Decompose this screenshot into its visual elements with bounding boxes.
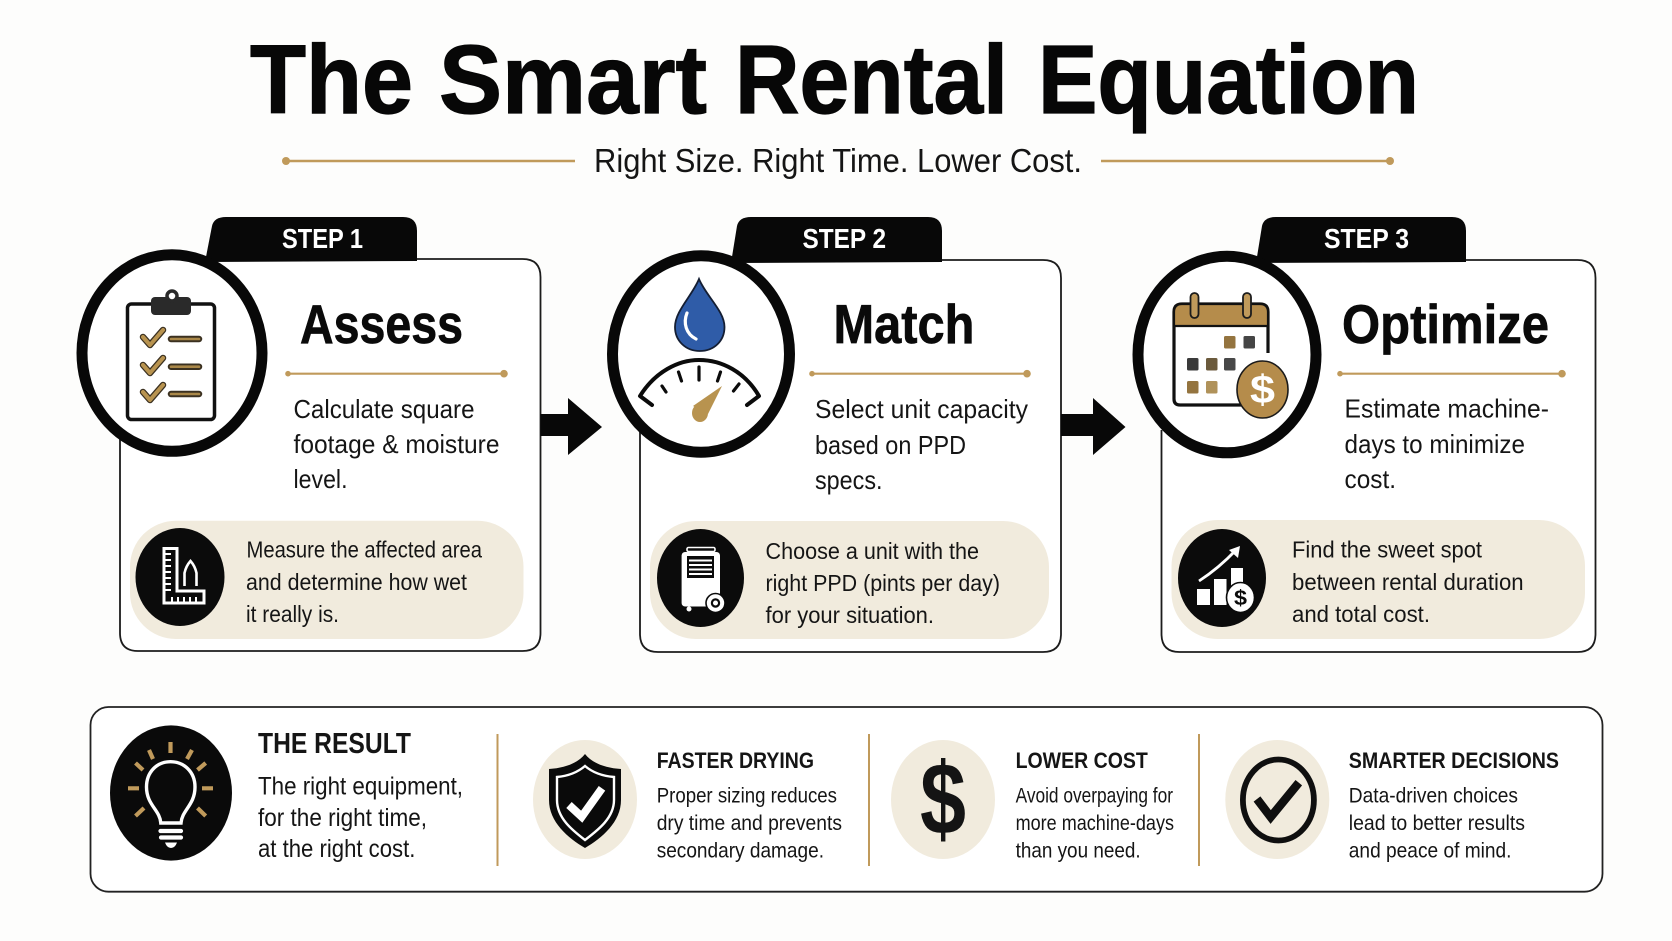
gold divider	[1337, 370, 1566, 378]
card outline	[120, 259, 540, 651]
subtitle with gold rules	[282, 142, 1394, 179]
description: specs.	[815, 465, 882, 495]
heading: assess: Assess	[300, 293, 463, 355]
smarter decisions text: Data-driven choices	[1349, 785, 1518, 808]
card outline	[1162, 260, 1596, 652]
result text: The right equipment,	[258, 772, 463, 800]
icon: calendar with coin	[1138, 256, 1316, 453]
icon: bar chart with dollar: $	[1234, 587, 1247, 610]
panel: step 2 match	[612, 217, 1061, 652]
result text	[258, 728, 463, 863]
title: The	[250, 25, 413, 134]
subtitle with gold rules: Right Size. Right Time. Lower Cost.	[594, 142, 1082, 179]
callout: sweet spot	[1172, 520, 1585, 639]
icon: ruler and pencil	[136, 528, 224, 626]
description: Calculate square	[294, 394, 474, 424]
faster drying text: secondary damage.	[657, 840, 824, 863]
step 2 tab: STEP 2	[802, 223, 886, 254]
step 3 tab	[1256, 217, 1466, 263]
arrow: step 1 to 2	[540, 398, 602, 455]
title: Rental	[735, 25, 1008, 134]
heading: optimize: Optimize	[1342, 293, 1549, 355]
callout text: for your situation.	[766, 602, 934, 628]
callout text: Find the sweet spot	[1292, 537, 1482, 563]
callout text: and determine how wet	[246, 569, 467, 595]
panel: step 1 assess	[82, 217, 540, 651]
smarter decisions text	[1349, 748, 1559, 863]
step 1 tab: STEP 1	[282, 223, 363, 254]
step 3 tab: STEP 3	[1324, 223, 1409, 254]
description	[815, 394, 1028, 495]
callout: choose a unit	[650, 521, 1049, 639]
smarter decisions text: and peace of mind.	[1349, 840, 1512, 863]
faster drying text: dry time and prevents	[657, 812, 842, 835]
callout text: Choose a unit with the	[766, 538, 979, 564]
icon: clipboard checklist	[82, 255, 262, 451]
icon: dollar sign	[891, 740, 995, 859]
lower cost text	[1016, 748, 1174, 863]
icon: water drop and gauge	[612, 256, 790, 452]
description: based on PPD	[815, 430, 966, 460]
item: faster drying	[533, 740, 842, 863]
description	[294, 394, 500, 494]
item: smarter decisions	[1225, 740, 1559, 863]
gold divider	[809, 370, 1031, 378]
description: cost.	[1344, 464, 1396, 494]
title: Equation	[1038, 25, 1419, 134]
icon: bar chart with dollar	[1178, 529, 1266, 627]
description: Estimate machine-	[1344, 394, 1549, 424]
callout text: Measure the affected area	[246, 537, 483, 563]
heading: match: Match	[834, 293, 974, 355]
result text: THE RESULT	[258, 728, 412, 760]
smarter decisions text: SMARTER DECISIONS	[1349, 748, 1559, 773]
description: Select unit capacity	[815, 394, 1028, 424]
description: level.	[294, 464, 348, 494]
lower cost text: more machine-days	[1016, 812, 1174, 835]
callout text: and total cost.	[1292, 601, 1430, 627]
gold divider	[285, 370, 508, 378]
result text: at the right cost.	[258, 835, 415, 863]
description: footage & moisture	[294, 429, 500, 459]
callout text	[766, 538, 1000, 628]
arrow: step 2 to 3	[1061, 398, 1126, 455]
item: lower cost	[891, 740, 1174, 863]
description	[1344, 394, 1549, 494]
title	[250, 25, 1419, 134]
panel: the result	[90, 707, 1602, 892]
title: Smart	[439, 25, 707, 134]
callout text	[246, 537, 483, 627]
faster drying text	[657, 748, 842, 863]
description: days to minimize	[1344, 429, 1525, 459]
faster drying text: Proper sizing reduces	[657, 785, 837, 808]
icon: dollar sign: $	[920, 742, 966, 856]
icon: shield check	[533, 740, 637, 859]
callout: measure	[130, 521, 524, 639]
smarter decisions text: lead to better results	[1349, 812, 1525, 835]
card outline	[640, 260, 1061, 652]
icon: calendar with coin: $	[1250, 368, 1275, 412]
icon: circled check	[1225, 740, 1329, 859]
step 1 tab	[205, 217, 417, 262]
faster drying text: FASTER DRYING	[657, 748, 814, 773]
result text: for the right time,	[258, 804, 427, 832]
lower cost text: than you need.	[1016, 840, 1141, 863]
callout text: between rental duration	[1292, 569, 1524, 595]
result panel outline	[90, 707, 1602, 892]
icon: light bulb	[110, 725, 232, 861]
lower cost text: LOWER COST	[1016, 748, 1148, 773]
callout text: it really is.	[246, 601, 339, 627]
step 2 tab	[731, 217, 942, 263]
callout text	[1292, 537, 1524, 627]
callout text: right PPD (pints per day)	[766, 570, 1000, 596]
lower cost text: Avoid overpaying for	[1016, 785, 1173, 808]
icon: dehumidifier	[657, 529, 744, 627]
panel: step 3 optimize	[1138, 217, 1596, 652]
